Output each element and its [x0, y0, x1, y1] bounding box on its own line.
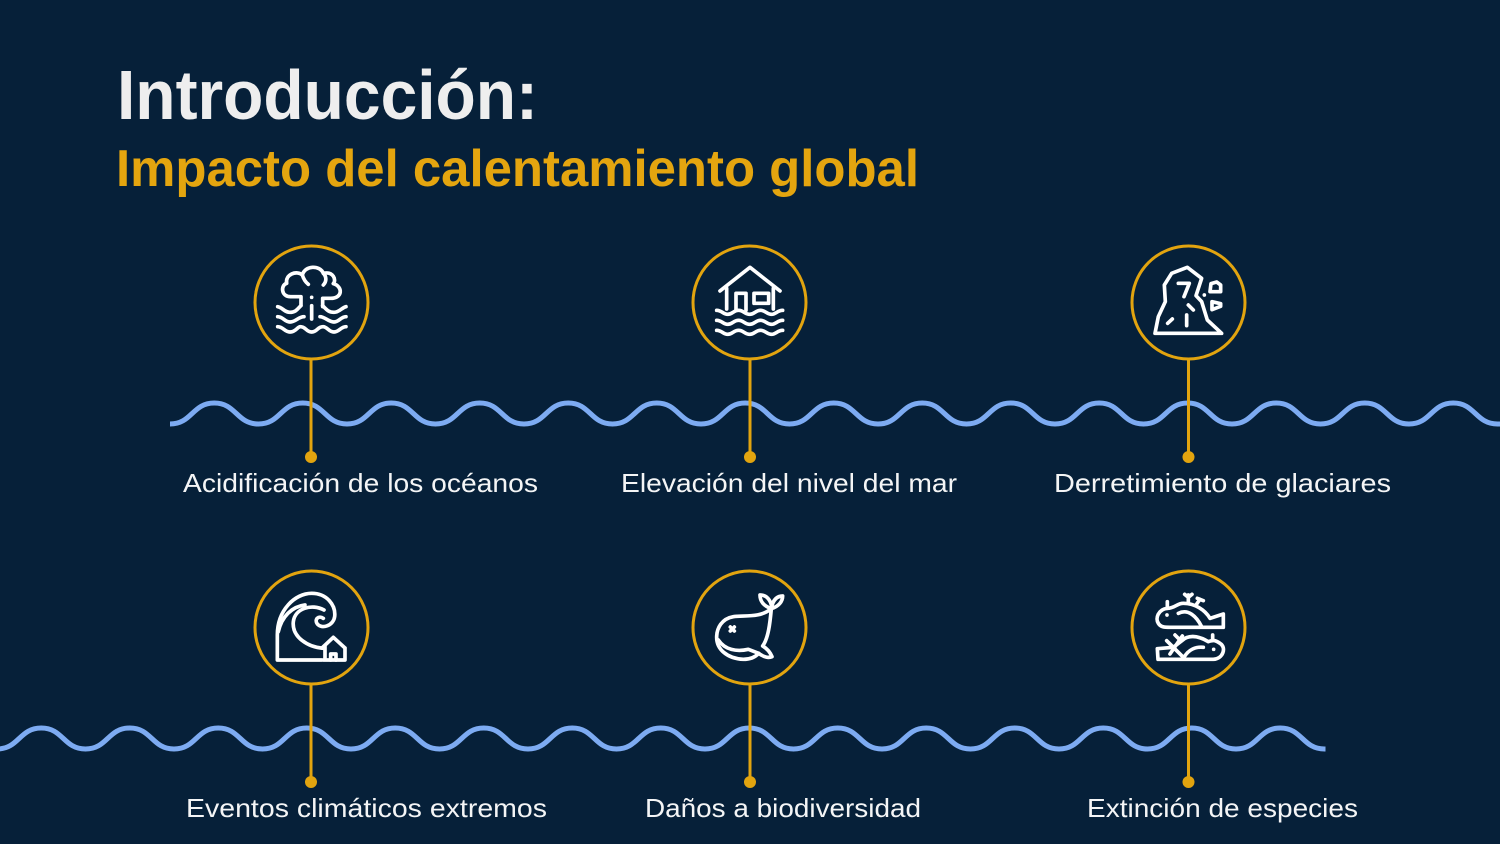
icon: flooded house — [717, 267, 783, 334]
label: Daños a biodiversidad — [645, 793, 921, 823]
label: Derretimiento de glaciares — [1054, 468, 1391, 498]
label: Eventos climáticos extremos — [186, 793, 547, 823]
label: Extinción de especies — [1087, 793, 1358, 823]
label: Elevación del nivel del mar — [621, 468, 957, 498]
icon: tidal wave and house — [277, 593, 345, 660]
title: Introducción: — [117, 56, 538, 134]
wave line: bottom row — [0, 728, 1326, 749]
item: Derretimiento de glaciares — [1054, 246, 1391, 498]
icon: tree over water — [278, 267, 346, 332]
wave line: top row — [170, 403, 1500, 424]
icon: melting glacier — [1155, 267, 1222, 333]
icon: dead fish — [1157, 594, 1223, 659]
subtitle: Impacto del calentamiento global — [116, 140, 919, 198]
label: Acidificación de los océanos — [183, 468, 538, 498]
item: Eventos climáticos extremos — [186, 571, 547, 823]
item: Daños a biodiversidad — [645, 571, 921, 823]
item: Acidificación de los océanos — [183, 246, 538, 498]
item: Extinción de especies — [1087, 571, 1358, 823]
icon: whale — [717, 595, 783, 659]
item: Elevación del nivel del mar — [621, 246, 957, 498]
